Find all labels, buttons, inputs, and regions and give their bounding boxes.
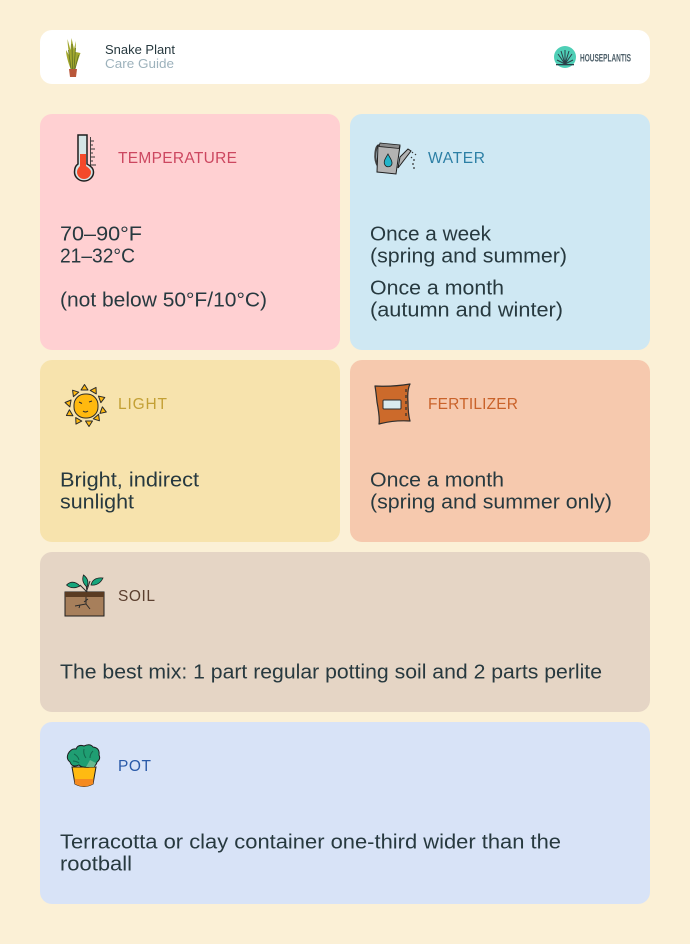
text: fertilizer schedule: (spring and summer only) <box>370 490 612 514</box>
text: temperature values: 70–90°F <box>60 222 142 246</box>
heading: light: LIGHT <box>118 396 168 413</box>
text: fertilizer schedule: Once a month <box>370 468 504 492</box>
text: pot advice: rootball <box>60 852 132 876</box>
panel: water <box>350 114 650 350</box>
header bar <box>40 30 650 84</box>
text: light needs: sunlight <box>60 490 134 514</box>
subtitle: Care Guide: Care Guide <box>105 56 174 71</box>
text: temperature values <box>60 222 267 312</box>
title: Snake Plant: Snake Plant <box>105 42 175 57</box>
icon: potted plant <box>67 745 100 786</box>
text: pot advice <box>60 830 561 876</box>
heading: pot: POT <box>118 758 152 775</box>
icon: thermometer <box>74 135 96 181</box>
icon: watering can <box>375 143 416 174</box>
text: soil mix: The best mix: 1 part regular potting soil and 2 parts perlite <box>60 660 602 684</box>
heading: temperature: TEMPERATURE <box>118 150 237 167</box>
heading: water: WATER <box>428 150 485 167</box>
text: water schedule: Once a week <box>370 222 492 246</box>
panel: soil <box>40 552 650 712</box>
logo: Houseplantis <box>554 46 631 68</box>
heading: soil: SOIL <box>118 588 155 605</box>
text: light needs <box>60 468 199 514</box>
icon: sun <box>64 384 108 426</box>
text: temperature values: (not below 50°F/10°C) <box>60 288 267 312</box>
text: fertilizer schedule <box>370 468 612 514</box>
text: temperature values: 21–32°C <box>60 244 135 268</box>
text: water schedule <box>370 222 567 322</box>
panel: pot <box>40 722 650 904</box>
text: water schedule: Once a month <box>370 276 504 300</box>
heading: fertilizer: FERTILIZER <box>428 396 518 413</box>
text: light needs: Bright, indirect <box>60 468 199 492</box>
text: water schedule: (spring and summer) <box>370 244 567 268</box>
panel: light <box>40 360 340 542</box>
icon: fertilizer bag <box>375 384 410 424</box>
icon: snake plant <box>66 38 80 77</box>
text: water schedule: (autumn and winter) <box>370 298 563 322</box>
logo: Houseplantis: HOUSEPLANTIS <box>580 52 631 64</box>
icon: soil and sprout <box>65 575 104 616</box>
text: pot advice: Terracotta or clay container one-third wider than the <box>60 830 561 854</box>
panel: temperature <box>40 114 340 350</box>
panel: fertilizer <box>350 360 650 542</box>
